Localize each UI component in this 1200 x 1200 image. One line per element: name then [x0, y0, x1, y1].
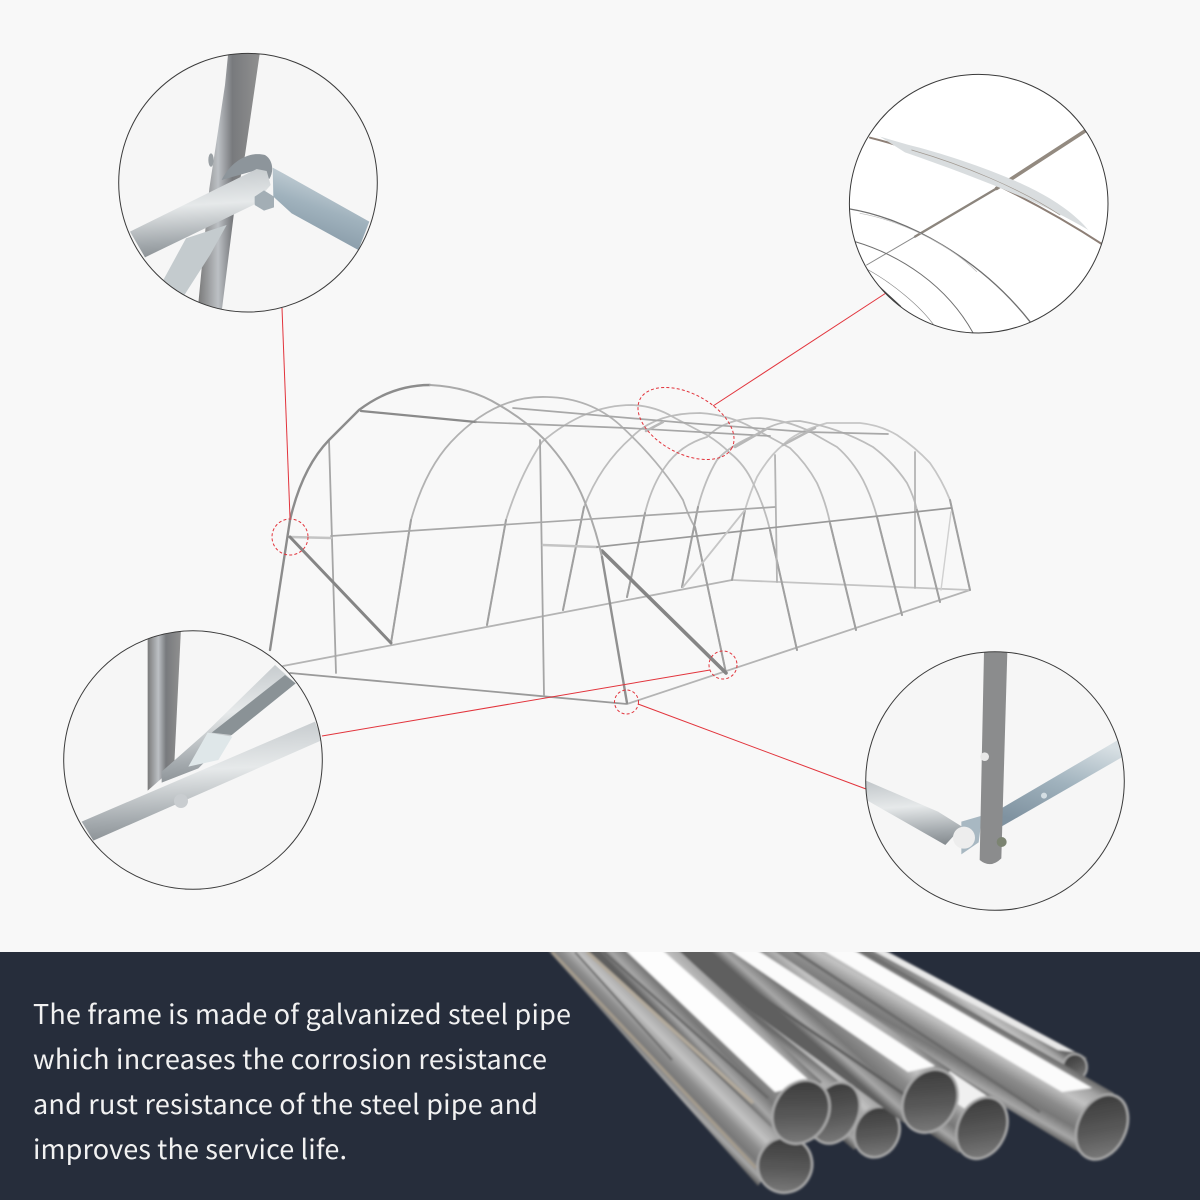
arches: [391, 397, 970, 673]
pipe F: [930, 1070, 1010, 1162]
description text: [33, 993, 571, 1167]
pipe E: [680, 952, 960, 1136]
base rails: [283, 580, 970, 704]
pipe D: [760, 1018, 902, 1160]
background: [0, 0, 1200, 952]
red dashed markers: [272, 373, 746, 714]
pipe G: [774, 952, 1131, 1162]
description text: The frame is made of galvanized steel pipe: [33, 993, 571, 1032]
pipe B: [546, 948, 822, 1200]
vertical posts: [329, 440, 915, 695]
darker arch legs: [391, 500, 970, 673]
tent frame: [270, 385, 970, 704]
diagonal braces: [290, 510, 951, 673]
purlin rails: [290, 408, 951, 547]
front arch: [270, 385, 627, 703]
detail circle: bottom-right joint: [865, 652, 1124, 910]
description text: which increases the corrosion resistance: [33, 1038, 547, 1077]
detail circle: top-right crossing: [849, 74, 1108, 333]
bottom panel: [0, 952, 1200, 1200]
pipe A: [585, 948, 841, 1154]
red leader lines: [282, 293, 886, 789]
pipe C: [730, 996, 862, 1146]
description text: improves the service life.: [33, 1128, 347, 1167]
detail circle: top-left joint: [119, 52, 377, 312]
pipe H: [864, 952, 1090, 1078]
detail circle: bottom-left joint: [64, 628, 322, 889]
steel pipes photo: [546, 948, 1138, 1200]
description text: and rust resistance of the steel pipe and: [33, 1083, 538, 1122]
